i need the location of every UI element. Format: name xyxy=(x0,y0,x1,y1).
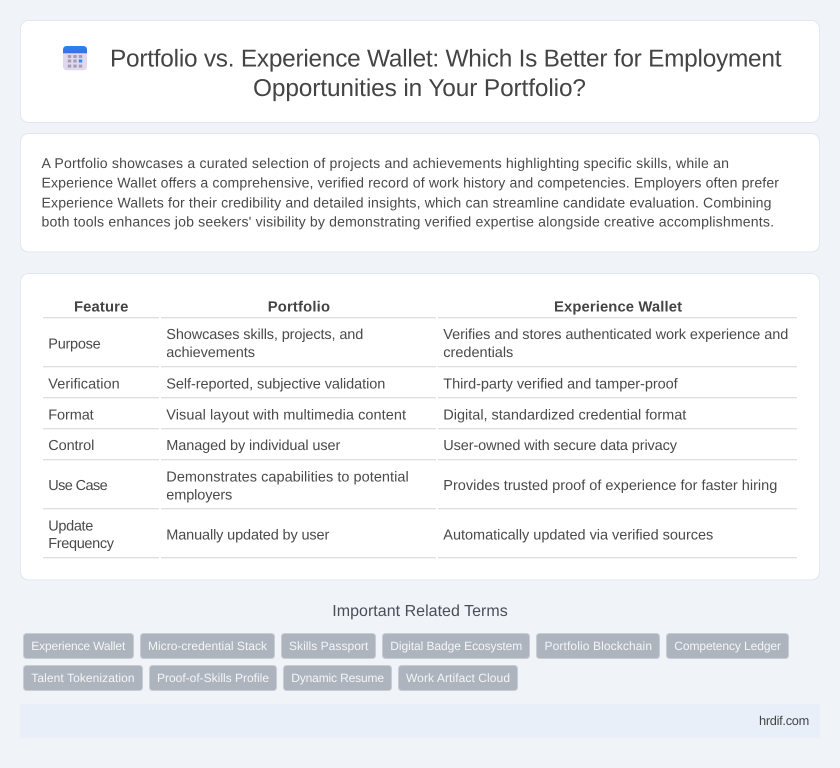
text block: summary paragraph xyxy=(42,155,779,230)
tag: Digital Badge Ecosystem: Digital Badge Ecosystem xyxy=(390,639,522,653)
row: Use Case: employers xyxy=(166,487,232,503)
heading: related terms: Important Related Terms xyxy=(332,603,508,620)
row: Update Frequency: Automatically updated via verified sources xyxy=(443,527,713,543)
panel: related term tags xyxy=(24,634,788,690)
tag: Proof-of-Skills Profile xyxy=(150,666,276,690)
row: Verification: Self-reported, subjective validation xyxy=(166,376,385,392)
row: Update Frequency: Manually updated by user xyxy=(166,527,329,543)
row: Verification xyxy=(43,376,797,398)
row: Verification: Verification xyxy=(48,376,120,392)
text block: summary paragraph: Experience Wallet offers a comprehensive, verified record of work history and competencies. Employers often prefer xyxy=(42,175,779,191)
row: Purpose: achievements xyxy=(166,345,255,361)
text block: summary paragraph: both tools enhances job seekers' visibility by demonstrating verified expertise alongside creative accomplishments. xyxy=(42,214,774,230)
row: Update Frequency: Update xyxy=(48,518,93,534)
title: Opportunities in Your Portfolio? xyxy=(253,75,586,102)
tag: Dynamic Resume: Dynamic Resume xyxy=(291,671,384,685)
row: Purpose: Purpose xyxy=(48,336,101,352)
table header: Portfolio xyxy=(268,300,330,316)
text block: summary paragraph: A Portfolio showcases a curated selection of projects and achievements highlighting specific skills, while an xyxy=(42,155,729,171)
tag: Talent Tokenization xyxy=(24,666,142,690)
tag: Competency Ledger xyxy=(666,634,788,658)
text block: summary paragraph: Experience Wallets for their credibility and detailed insights, which can streamline candidate evaluation. Combining xyxy=(42,194,772,210)
row: Purpose xyxy=(43,327,797,367)
row: Purpose: Verifies and stores authenticated work experience and xyxy=(443,327,788,343)
panel: title card xyxy=(20,20,820,122)
row: Control: User-owned with secure data privacy xyxy=(443,438,678,454)
row: Control xyxy=(43,438,797,460)
tag: Experience Wallet xyxy=(24,634,134,658)
row: Use Case: Demonstrates capabilities to potential xyxy=(166,469,409,485)
icon: calendar xyxy=(63,46,87,70)
tag: Digital Badge Ecosystem xyxy=(382,634,530,658)
tag: Portfolio Blockchain xyxy=(536,634,660,658)
row: Purpose: Showcases skills, projects, and xyxy=(166,327,363,343)
tag: Dynamic Resume xyxy=(284,666,392,690)
tag: Work Artifact Cloud: Work Artifact Cloud xyxy=(406,671,510,685)
row: Use Case: Provides trusted proof of experience for faster hiring xyxy=(443,478,777,494)
row: Use Case: Use Case xyxy=(48,478,108,494)
row: Update Frequency xyxy=(43,518,797,558)
tag: Talent Tokenization: Talent Tokenization xyxy=(31,671,135,685)
tag: Skills Passport: Skills Passport xyxy=(289,639,369,653)
tag: Experience Wallet: Experience Wallet xyxy=(31,639,126,653)
table header: Feature xyxy=(74,300,128,316)
row: Control: Managed by individual user xyxy=(166,438,340,454)
row: Format: Digital, standardized credential format xyxy=(443,407,686,423)
row: Format: Visual layout with multimedia content xyxy=(166,407,406,423)
row: Format: Format xyxy=(48,407,94,423)
tag: Proof-of-Skills Profile: Proof-of-Skills Profile xyxy=(157,671,269,685)
panel: comparison table xyxy=(20,274,820,580)
row: Verification: Third-party verified and tamper-proof xyxy=(443,376,679,392)
row: Format xyxy=(43,407,797,429)
panel: summary xyxy=(20,134,820,252)
footer: hrdif.com xyxy=(759,713,809,728)
title: Portfolio vs. Experience Wallet: Which Is Better for Employment xyxy=(110,46,782,73)
row: Update Frequency: Frequency xyxy=(48,536,115,552)
row: Purpose: credentials xyxy=(443,345,513,361)
table header xyxy=(43,300,797,318)
tag: Portfolio Blockchain: Portfolio Blockchain xyxy=(544,639,652,653)
tag: Skills Passport xyxy=(282,634,376,658)
title xyxy=(110,46,782,102)
tag: Competency Ledger: Competency Ledger xyxy=(674,639,781,653)
table header: Experience Wallet xyxy=(554,300,682,316)
footer xyxy=(20,704,820,738)
row: Use Case xyxy=(43,469,797,509)
tag: Micro-credential Stack: Micro-credential Stack xyxy=(148,639,268,653)
tag: Work Artifact Cloud xyxy=(398,666,518,690)
row: Control: Control xyxy=(48,438,94,454)
tag: Micro-credential Stack xyxy=(140,634,274,658)
